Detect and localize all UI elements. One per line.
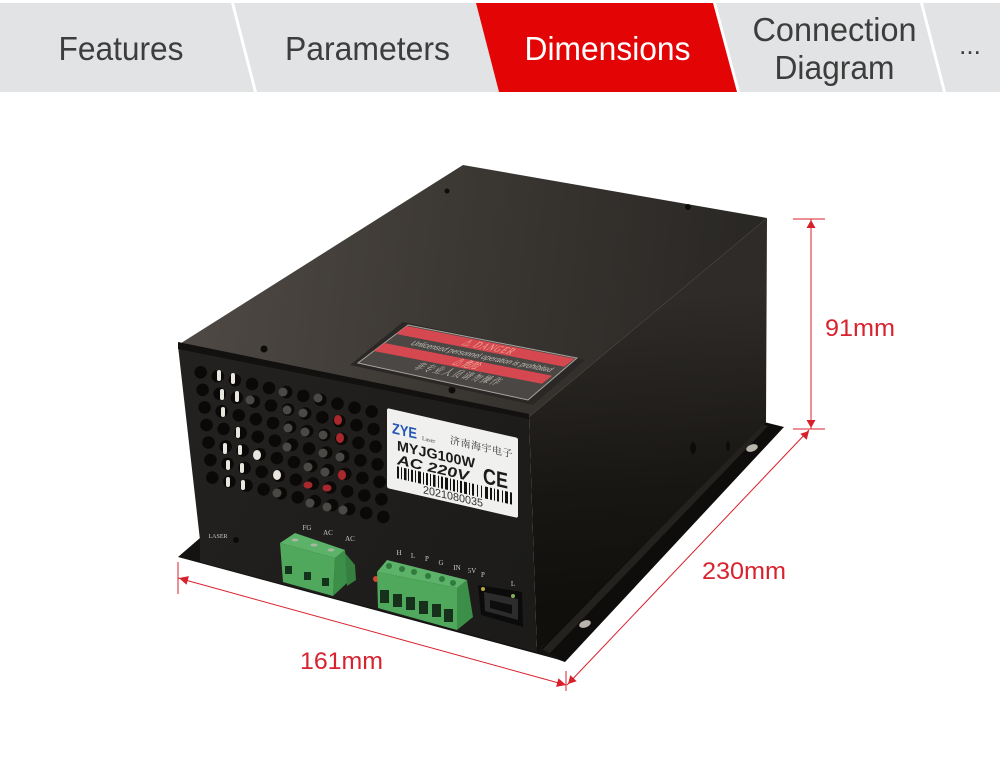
front panel silk-screen labels: FG — [303, 524, 311, 532]
product label: 2021080035 — [423, 484, 483, 510]
product label: AC 220V — [396, 452, 471, 485]
right mounting flange — [537, 421, 784, 662]
6-pin green terminal — [377, 560, 473, 630]
front panel silk-screen labels: L — [411, 552, 415, 560]
tab: Connection Diagram: Diagram — [774, 49, 894, 86]
tab: Parameters — [234, 3, 499, 92]
ventilation holes — [194, 366, 390, 523]
top face — [178, 165, 767, 417]
dimension: height 91mm: 91mm — [825, 315, 895, 342]
tab: Connection Diagram — [716, 3, 943, 92]
tab: Connection Diagram: Connection — [752, 11, 916, 48]
warning sticker: Unlicensed personnel operation is prohibited — [408, 340, 557, 374]
front panel silk-screen labels: L — [511, 580, 515, 588]
front panel silk-screen labels: P — [481, 571, 485, 579]
product label: CE — [483, 463, 508, 494]
warning sticker: 非专业人员请勿操作 — [410, 361, 509, 387]
warning sticker — [350, 322, 585, 405]
dimension: width 161mm — [178, 562, 566, 691]
tab bar — [0, 3, 1000, 92]
tab: Parameters: Parameters — [285, 30, 450, 67]
front face — [178, 346, 537, 652]
front panel silk-screen labels: P — [425, 555, 429, 563]
product label — [387, 408, 518, 518]
front mounting flange — [178, 538, 565, 662]
right face — [529, 218, 767, 652]
front panel silk-screen labels: AC — [345, 535, 355, 543]
red LED — [373, 576, 379, 582]
tab: Features — [0, 3, 254, 92]
dimension: height 91mm — [793, 219, 895, 429]
front panel silk-screen labels: AC — [323, 529, 333, 537]
product label: 济南海宇电子 — [450, 434, 513, 461]
front panel silk-screen labels — [208, 524, 515, 588]
tab: Dimensions (active) — [476, 3, 737, 92]
dimension: width 161mm: 161mm — [300, 648, 383, 675]
tab: Dimensions (active): Dimensions — [524, 30, 690, 67]
front panel silk-screen labels: IN — [453, 564, 461, 572]
tab: Features: Features — [58, 30, 184, 67]
front panel silk-screen labels: LASER — [208, 534, 228, 540]
dimension: depth 230mm: 230mm — [702, 558, 786, 585]
product label: MYJG100W — [397, 438, 476, 472]
front panel silk-screen labels: H — [396, 549, 402, 557]
laser indicator — [233, 537, 239, 543]
product label: ZYE — [392, 420, 417, 443]
screws on case — [260, 188, 730, 454]
product: laser power supply — [178, 165, 784, 662]
3-pin green terminal — [280, 533, 356, 596]
front panel silk-screen labels: G — [438, 559, 444, 567]
warning sticker: ⚠ DANGER — [458, 338, 520, 357]
tab: more: ... — [959, 30, 981, 60]
warning sticker: ⚠ 危险 — [449, 357, 486, 371]
dimension: depth 230mm — [567, 430, 809, 685]
front top bevel — [178, 342, 529, 419]
RJ45 port — [478, 585, 523, 627]
tab: more — [923, 3, 1000, 92]
front panel silk-screen labels: 5V — [468, 567, 476, 575]
product label: Laser — [422, 436, 435, 445]
